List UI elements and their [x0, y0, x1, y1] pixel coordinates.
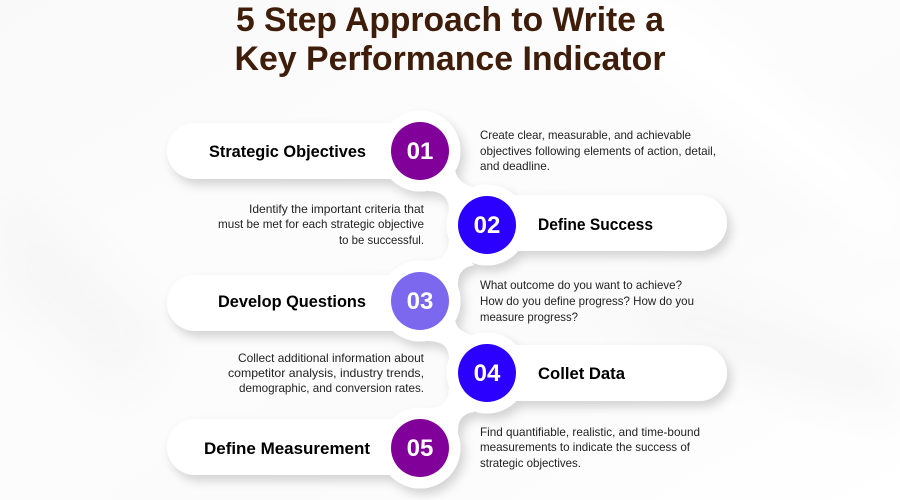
step 4: Collet Data	[228, 344, 626, 402]
description 2: to be successful.	[339, 233, 424, 247]
badge 02	[458, 196, 516, 254]
number 04: 04	[474, 360, 501, 387]
number 01: 01	[407, 138, 433, 165]
description 4: competitor analysis, industry trends,	[228, 366, 424, 380]
description 5: strategic objectives.	[480, 456, 581, 470]
description 2: Identify the important criteria that	[249, 202, 425, 216]
neck 3 to 4	[428, 318, 472, 358]
badge 04	[458, 344, 516, 402]
description 2	[218, 202, 425, 247]
pill 2	[470, 195, 727, 251]
ring 1	[380, 110, 460, 192]
step 1: Strategic Objectives	[209, 122, 716, 180]
ring 2	[446, 184, 528, 266]
description 1: objectives following elements of action, detail,	[480, 144, 716, 158]
pill 4	[470, 345, 727, 401]
number 05: 05	[407, 435, 433, 462]
description 4	[228, 351, 425, 395]
step 2: Define Success	[218, 196, 653, 254]
title: Key Performance Indicator	[234, 40, 666, 78]
description 2: must be met for each strategic objective	[218, 217, 424, 231]
step 3: Develop Questions	[218, 272, 694, 330]
neck 1 to 2	[428, 168, 472, 210]
title	[234, 1, 666, 78]
heading 5: Define Measurement	[204, 439, 370, 458]
description 4: Collect additional information about	[238, 351, 425, 365]
heading 1: Strategic Objectives	[209, 142, 366, 161]
description 3: What outcome do you want to achieve?	[480, 278, 682, 292]
description 1	[480, 128, 716, 173]
description 5	[480, 425, 700, 470]
heading 3: Develop Questions	[218, 292, 366, 311]
description 3	[480, 278, 694, 324]
description 3: measure progress?	[480, 310, 578, 324]
description 5: Find quantifiable, realistic, and time-bound	[480, 425, 700, 439]
step 5: Define Measurement	[204, 419, 700, 477]
ring 3	[380, 260, 460, 342]
heading 2: Define Success	[538, 215, 653, 234]
badge 01	[391, 122, 449, 180]
number 03: 03	[407, 288, 433, 315]
title: 5 Step Approach to Write a	[236, 1, 665, 39]
neck 4 to 5	[428, 388, 474, 435]
ring 4	[446, 332, 528, 414]
badge 03	[391, 272, 449, 330]
pill 5	[167, 419, 437, 475]
neck 2 to 3	[428, 240, 474, 288]
description 1: Create clear, measurable, and achievable	[480, 128, 691, 142]
pill 1	[167, 123, 437, 179]
description 4: demographic, and conversion rates.	[239, 381, 424, 395]
description 1: and deadline.	[480, 159, 550, 173]
number 02: 02	[474, 212, 500, 239]
connected white ribbon: pills, rings and necks	[167, 110, 727, 488]
description 3: How do you define progress? How do you	[480, 294, 694, 308]
description 5: measurements to indicate the success of	[480, 440, 691, 454]
badge 05	[391, 419, 449, 477]
pill 3	[167, 275, 437, 331]
ring 5	[380, 408, 460, 488]
heading 4: Collet Data	[538, 364, 626, 383]
